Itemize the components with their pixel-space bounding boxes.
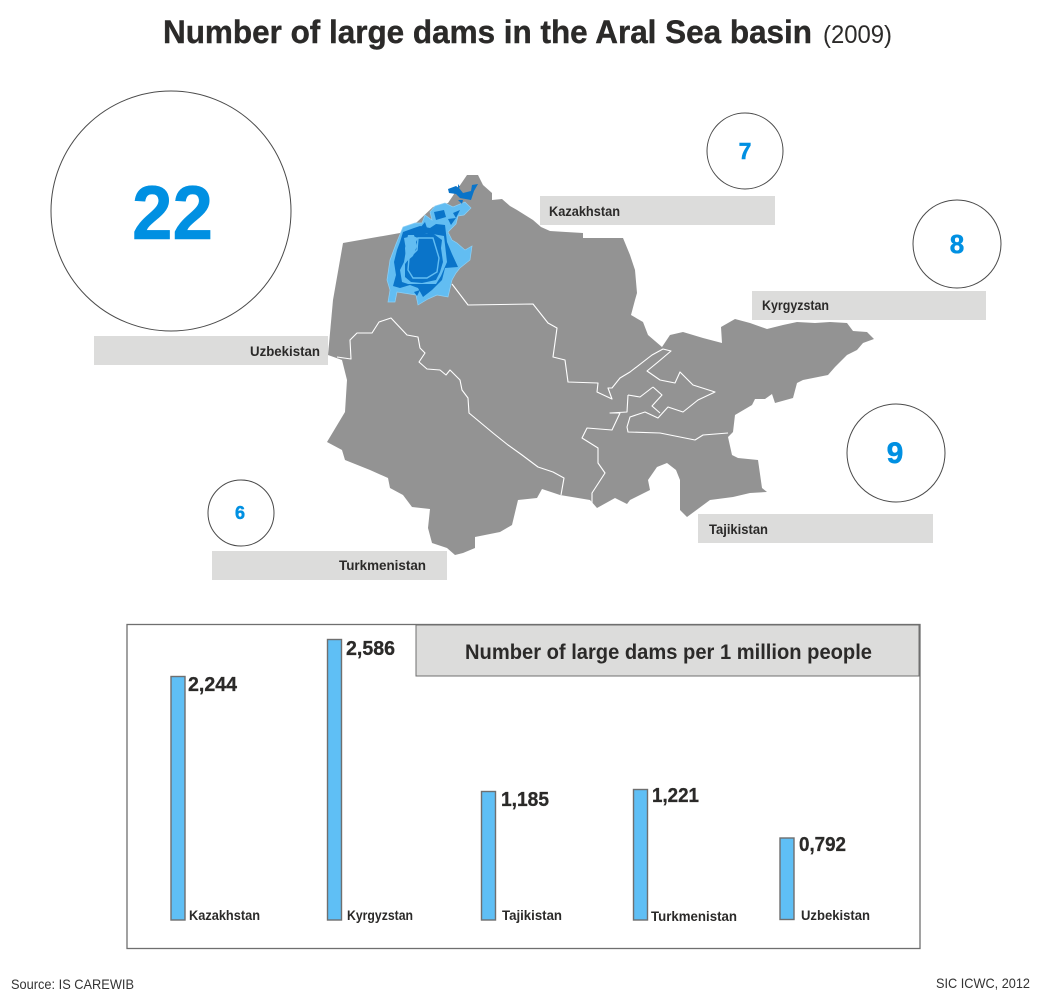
Tajikistan callout (698, 404, 945, 543)
credit note: SIC ICWC, 2012 (936, 975, 1030, 991)
Kyrgyzstan callout: 8 (950, 229, 964, 259)
map: Aral Sea basin (327, 175, 874, 555)
Turkmenistan callout (208, 480, 447, 580)
bar: Uzbekistan: Uzbekistan (801, 907, 870, 923)
Aral Sea: light inner bands (400, 233, 447, 284)
bar: Uzbekistan: 0,792 (799, 834, 846, 856)
bar: Tajikistan: Tajikistan (502, 907, 562, 923)
title: Number of large dams in the Aral Sea basin (163, 14, 812, 50)
Aral Sea: northern dark patches (414, 210, 460, 296)
bar: Tajikistan (482, 789, 562, 923)
Uzbekistan callout: Uzbekistan (250, 343, 320, 359)
title: (2009) (823, 21, 892, 49)
Aral Sea: drained sea bed (387, 202, 472, 305)
panel heading (416, 625, 919, 676)
panel: dams per 1 million people (127, 624, 920, 948)
Aral Sea: former water levels (393, 224, 458, 297)
Tajikistan callout: Tajikistan (709, 521, 768, 537)
bar: Tajikistan: 1,185 (501, 789, 549, 811)
Kazakhstan callout: 7 (739, 138, 751, 164)
Uzbekistan callout (51, 91, 328, 365)
bar: Kyrgyzstan (328, 638, 413, 923)
bar: Kyrgyzstan: 2,586 (346, 638, 395, 660)
Turkmenistan callout: Turkmenistan (339, 557, 426, 573)
Uzbekistan callout: 22 (132, 171, 213, 256)
bar: Kazakhstan: Kazakhstan (189, 907, 260, 923)
panel heading: Number of large dams per 1 million people (465, 641, 872, 664)
Aral Sea: western lobe (405, 235, 417, 262)
border: Turkmenistan and Uzbekistan (337, 318, 564, 495)
basin landmass (327, 175, 874, 555)
source note: Source: IS CAREWIB (11, 976, 134, 992)
Aral Sea: second dark ring (405, 232, 443, 283)
Kazakhstan callout: Kazakhstan (549, 203, 620, 219)
Tajikistan callout: 9 (887, 437, 903, 470)
Aral Sea: north lakes (448, 184, 478, 204)
border: Tajikistan and Kyrgyzstan enclaves (582, 387, 662, 505)
border: Kazakhstan and Uzbekistan (452, 284, 728, 440)
bar: Kazakhstan (171, 674, 260, 923)
Aral Sea: remaining water (408, 238, 439, 278)
bar: Kyrgyzstan: Kyrgyzstan (347, 907, 413, 923)
Turkmenistan callout: 6 (235, 503, 245, 523)
bar: Turkmenistan: 1,221 (652, 785, 699, 807)
Kazakhstan callout (540, 113, 783, 225)
bar: Uzbekistan (780, 834, 870, 923)
bar: Turkmenistan (634, 785, 737, 924)
bar: Kazakhstan: 2,244 (188, 674, 238, 696)
bar: Turkmenistan: Turkmenistan (651, 908, 737, 924)
Kyrgyzstan callout (752, 200, 1001, 320)
Kyrgyzstan callout: Kyrgyzstan (762, 297, 829, 313)
